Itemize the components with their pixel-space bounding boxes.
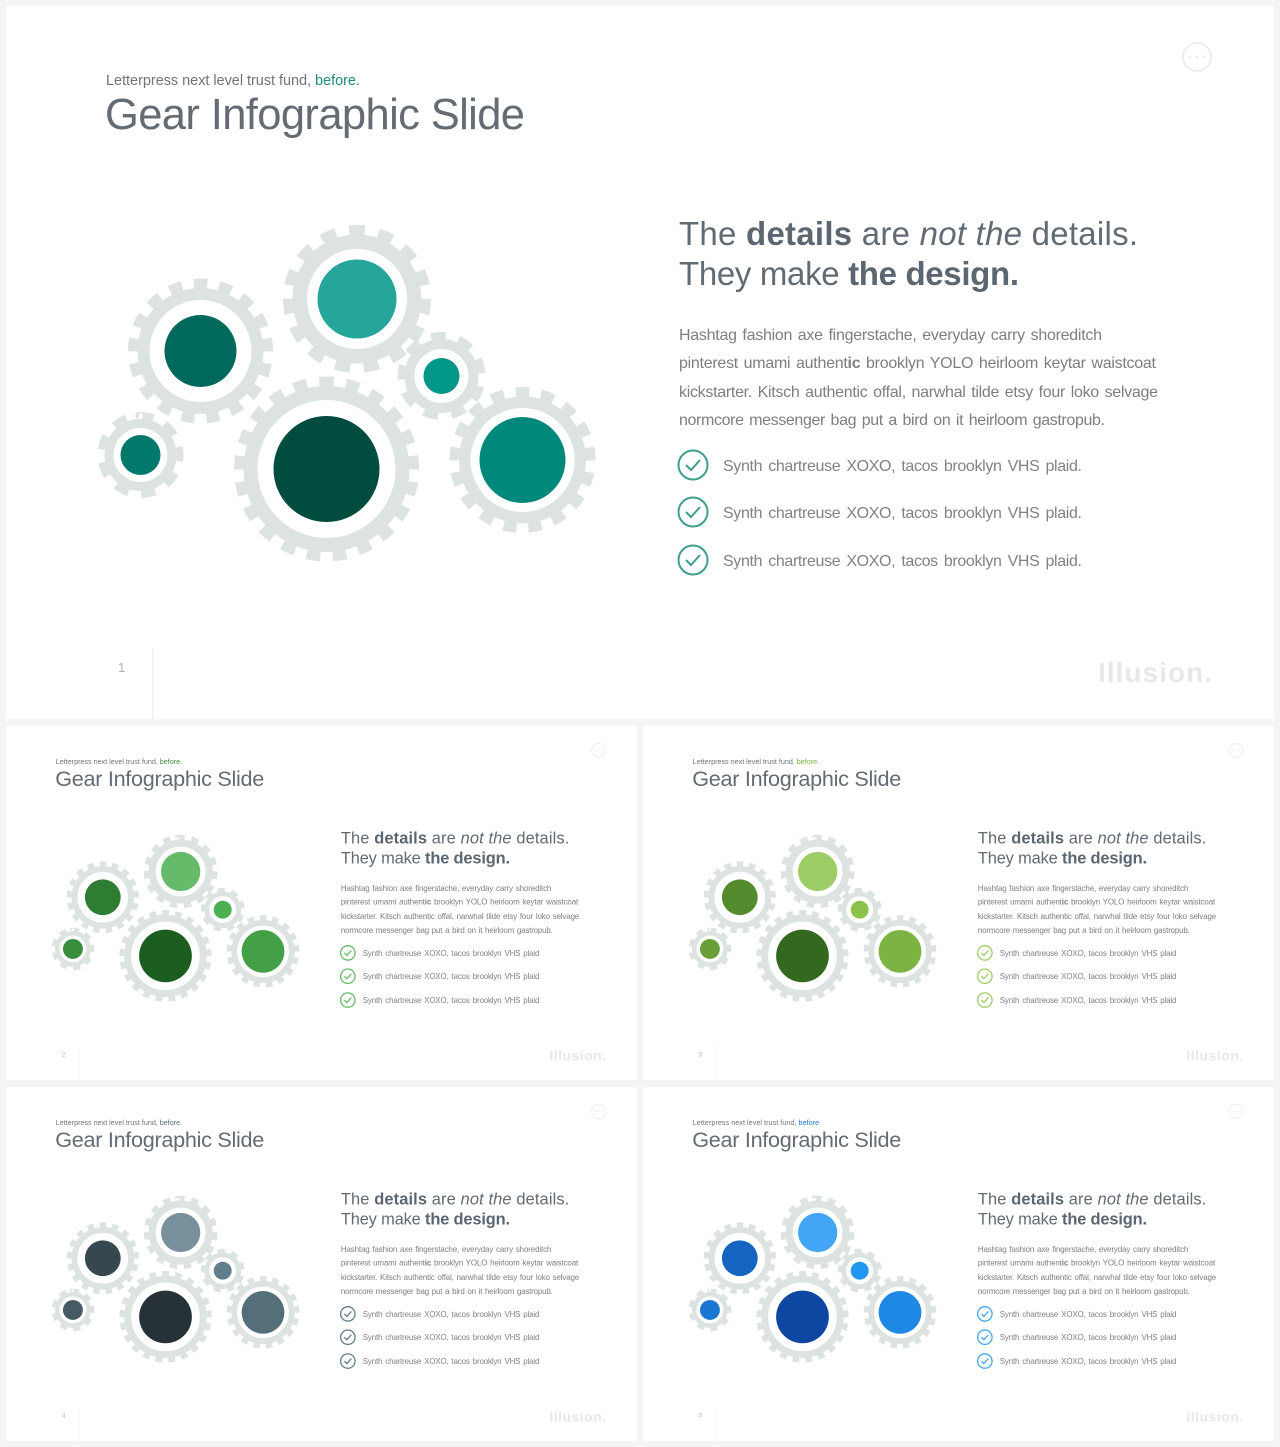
body text	[341, 884, 580, 935]
icon: menu dots	[592, 1104, 606, 1118]
body text: pinterest umami authentic brooklyn YOLO heirloom keytar waistcoat	[341, 898, 579, 907]
title: Gear Infographic Slide	[692, 766, 901, 791]
icon: menu dots	[592, 743, 606, 757]
body text: Hashtag fashion axe fingerstache, everyday carry shoreditch	[679, 327, 1102, 344]
heading: The details are not the details.	[978, 1191, 1206, 1209]
page number: 3	[699, 1052, 703, 1059]
body text: Hashtag fashion axe fingerstache, everyday carry shoreditch	[978, 884, 1188, 893]
body text: pinterest umami authentic brooklyn YOLO heirloom keytar waistcoat	[978, 898, 1216, 907]
body text: normcore messenger bag put a bird on it heirloom gastropub.	[341, 926, 553, 935]
body text: Hashtag fashion axe fingerstache, everyday carry shoreditch	[978, 1245, 1188, 1254]
logo: Illusion.	[549, 1409, 606, 1425]
subtitle: Letterpress next level trust fund, before.	[693, 757, 819, 766]
heading	[679, 215, 1138, 292]
body text	[978, 884, 1217, 935]
icon: menu dots	[1229, 1104, 1243, 1118]
body text: normcore messenger bag put a bird on it heirloom gastropub.	[341, 1287, 553, 1296]
checklist: Synth chartreuse XOXO, tacos brooklyn VHS plaid	[1000, 949, 1176, 958]
panel: slide 1 teal	[6, 6, 1274, 719]
heading: They make the design.	[679, 255, 1019, 292]
icon: menu dots	[1183, 43, 1211, 71]
heading: The details are not the details.	[679, 215, 1138, 252]
checklist: Synth chartreuse XOXO, tacos brooklyn VHS plaid	[363, 1310, 539, 1319]
body text: Hashtag fashion axe fingerstache, everyday carry shoreditch	[341, 884, 551, 893]
title: Gear Infographic Slide	[692, 1127, 901, 1152]
body text: pinterest umami authentic brooklyn YOLO heirloom keytar waistcoat	[679, 355, 1157, 372]
body text	[679, 327, 1158, 429]
body text: kickstarter. Kitsch authentic offal, narwhal tilde etsy four loko selvage	[341, 912, 580, 921]
body text: pinterest umami authentic brooklyn YOLO heirloom keytar waistcoat	[978, 1259, 1216, 1268]
heading: They make the design.	[978, 850, 1147, 868]
heading: They make the design.	[341, 850, 510, 868]
gear cluster	[100, 223, 596, 563]
gear cluster	[53, 1195, 300, 1363]
page number: 1	[118, 660, 125, 675]
body text: kickstarter. Kitsch authentic offal, narwhal tilde etsy four loko selvage	[978, 912, 1217, 921]
heading	[341, 1191, 569, 1229]
checklist: Synth chartreuse XOXO, tacos brooklyn VHS plaid	[1000, 1310, 1176, 1319]
checklist	[678, 450, 1082, 574]
body text: normcore messenger bag put a bird on it heirloom gastropub.	[978, 926, 1190, 935]
logo: Illusion.	[549, 1048, 606, 1064]
panel: slide 4 blue grey	[6, 1087, 637, 1441]
subtitle: Letterpress next level trust fund, before.	[56, 757, 182, 766]
body text: normcore messenger bag put a bird on it heirloom gastropub.	[679, 412, 1105, 429]
checklist	[978, 1307, 1176, 1368]
checklist: Synth chartreuse XOXO, tacos brooklyn VHS plaid	[1000, 1357, 1176, 1366]
heading	[341, 830, 569, 868]
panel: slide 2 green	[6, 726, 637, 1080]
checklist	[978, 946, 1176, 1007]
checklist	[341, 946, 539, 1007]
body text	[341, 1245, 580, 1296]
gear cluster	[690, 1195, 937, 1363]
heading: They make the design.	[978, 1211, 1147, 1229]
title: Gear Infographic Slide	[55, 766, 264, 791]
body text: kickstarter. Kitsch authentic offal, narwhal tilde etsy four loko selvage	[341, 1273, 580, 1282]
panel: slide 5 blue	[643, 1087, 1274, 1441]
body text: kickstarter. Kitsch authentic offal, narwhal tilde etsy four loko selvage	[679, 384, 1158, 401]
checklist: Synth chartreuse XOXO, tacos brooklyn VHS plaid	[1000, 972, 1176, 981]
checklist: Synth chartreuse XOXO, tacos brooklyn VHS plaid	[363, 996, 539, 1005]
body text: kickstarter. Kitsch authentic offal, narwhal tilde etsy four loko selvage	[978, 1273, 1217, 1282]
page number: 2	[62, 1052, 66, 1059]
heading	[978, 1191, 1206, 1229]
checklist: Synth chartreuse XOXO, tacos brooklyn VHS plaid	[1000, 1333, 1176, 1342]
logo: Illusion.	[1186, 1048, 1243, 1064]
body text	[978, 1245, 1217, 1296]
heading	[978, 830, 1206, 868]
icon: menu dots	[1229, 743, 1243, 757]
checklist: Synth chartreuse XOXO, tacos brooklyn VHS plaid	[363, 949, 539, 958]
checklist: Synth chartreuse XOXO, tacos brooklyn VHS plaid.	[723, 553, 1082, 570]
gear cluster	[53, 834, 300, 1002]
heading: The details are not the details.	[341, 1191, 569, 1209]
gear cluster	[690, 834, 937, 1002]
heading: They make the design.	[341, 1211, 510, 1229]
checklist: Synth chartreuse XOXO, tacos brooklyn VHS plaid	[363, 972, 539, 981]
checklist: Synth chartreuse XOXO, tacos brooklyn VHS plaid.	[723, 505, 1082, 522]
checklist: Synth chartreuse XOXO, tacos brooklyn VHS plaid	[363, 1333, 539, 1342]
panel: slide 3 light green	[643, 726, 1274, 1080]
checklist	[341, 1307, 539, 1368]
checklist: Synth chartreuse XOXO, tacos brooklyn VHS plaid.	[723, 458, 1082, 475]
logo: Illusion.	[1098, 657, 1212, 688]
subtitle: Letterpress next level trust fund, before	[693, 1118, 819, 1127]
title: Gear Infographic Slide	[105, 91, 525, 139]
heading: The details are not the details.	[978, 830, 1206, 848]
logo: Illusion.	[1186, 1409, 1243, 1425]
page number: 5	[699, 1413, 703, 1420]
body text: pinterest umami authentic brooklyn YOLO heirloom keytar waistcoat	[341, 1259, 579, 1268]
title: Gear Infographic Slide	[55, 1127, 264, 1152]
heading: The details are not the details.	[341, 830, 569, 848]
subtitle: Letterpress next level trust fund, before.	[56, 1118, 182, 1127]
body text: Hashtag fashion axe fingerstache, everyday carry shoreditch	[341, 1245, 551, 1254]
page number: 4	[62, 1413, 66, 1420]
checklist: Synth chartreuse XOXO, tacos brooklyn VHS plaid	[1000, 996, 1176, 1005]
checklist: Synth chartreuse XOXO, tacos brooklyn VHS plaid	[363, 1357, 539, 1366]
subtitle: Letterpress next level trust fund, before.	[106, 73, 360, 89]
body text: normcore messenger bag put a bird on it heirloom gastropub.	[978, 1287, 1190, 1296]
